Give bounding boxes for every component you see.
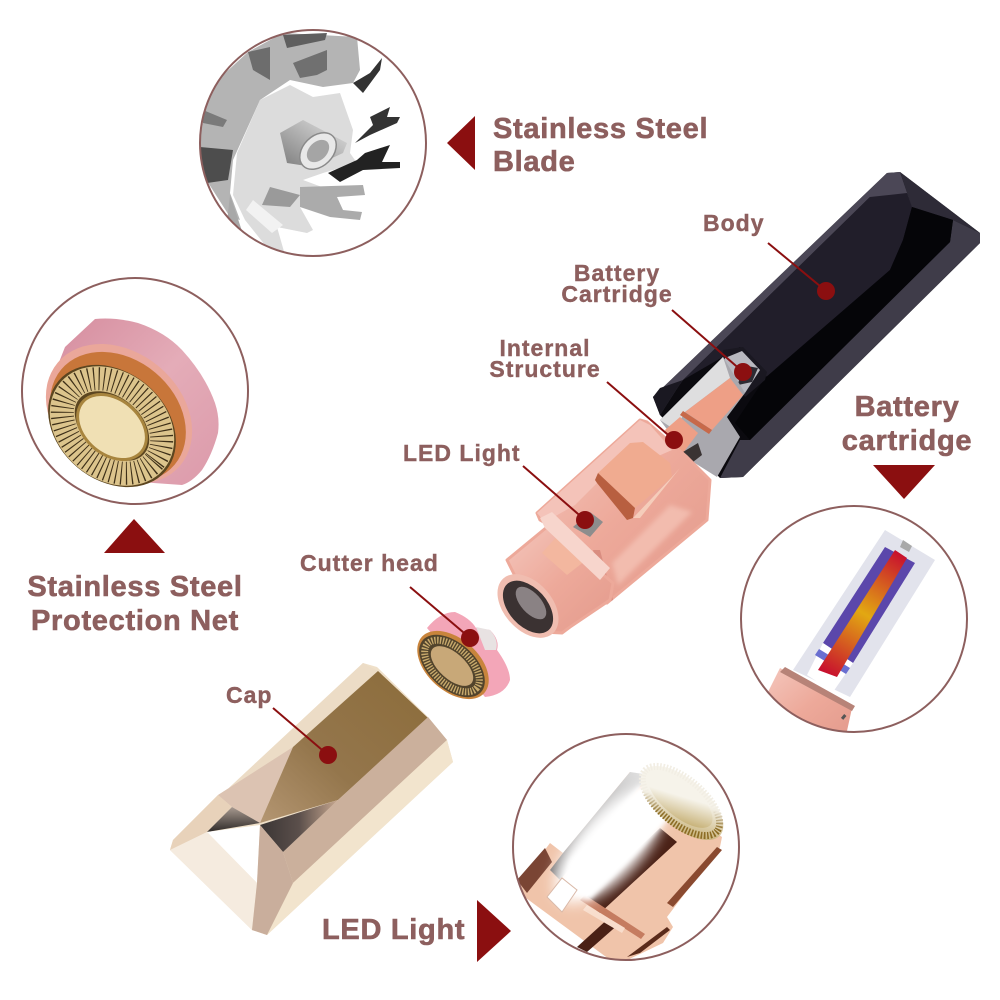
callout: battery cartridge: Cartridge xyxy=(561,281,673,307)
callout: battery cartridge: Battery xyxy=(574,260,660,286)
body: black outer shell xyxy=(653,172,980,478)
center cylinder xyxy=(280,120,347,167)
heading: LED light: LED Light xyxy=(322,914,465,946)
arrow: battery triangle xyxy=(873,465,935,499)
internal structure: gray cylinder and copper strip xyxy=(660,357,745,477)
heading: stainless steel protection net xyxy=(27,571,243,637)
callout: battery cartridge xyxy=(561,260,752,381)
panel: stainless steel protection net circle xyxy=(18,278,248,513)
callout: internal structure: Internal xyxy=(499,335,591,361)
arrow: net triangle xyxy=(104,519,165,553)
heading: battery cartridge xyxy=(842,391,972,457)
cap xyxy=(170,663,453,935)
callout: cap: Cap xyxy=(226,682,272,708)
heading: battery cartridge: cartridge xyxy=(842,425,972,457)
heading: stainless steel blade xyxy=(493,113,708,178)
callout: cap xyxy=(226,682,337,764)
white LED glow xyxy=(546,784,670,912)
callout: cutter head xyxy=(300,550,479,647)
panel: LED light circle xyxy=(513,734,739,965)
callout: internal structure: Structure xyxy=(489,356,601,382)
callout: LED light xyxy=(403,440,594,529)
callout: internal structure xyxy=(489,335,683,449)
LED / head: rose gold head xyxy=(485,420,710,650)
callout: LED light: LED Light xyxy=(403,440,521,466)
dark forks xyxy=(353,58,382,93)
heading: stainless steel protection net: Stainless Steel xyxy=(27,571,243,603)
heading: stainless steel blade: Stainless Steel xyxy=(493,113,708,145)
gray fork xyxy=(300,185,365,220)
callout: cutter head: Cutter head xyxy=(300,550,439,576)
cutter head xyxy=(404,612,510,712)
panel: battery cartridge circle xyxy=(741,506,967,740)
arrow: blade triangle xyxy=(447,116,475,170)
arrow: LED triangle xyxy=(477,900,511,962)
heading: stainless steel protection net: Protection Net xyxy=(31,605,239,637)
heading: stainless steel blade: Blade xyxy=(493,146,575,178)
callout: body: Body xyxy=(703,210,764,236)
heading: battery cartridge: Battery xyxy=(855,391,959,423)
cutter face xyxy=(640,766,724,840)
panel: stainless steel blade circle xyxy=(200,30,426,256)
callout: body xyxy=(703,210,835,300)
gear blade xyxy=(233,85,357,255)
